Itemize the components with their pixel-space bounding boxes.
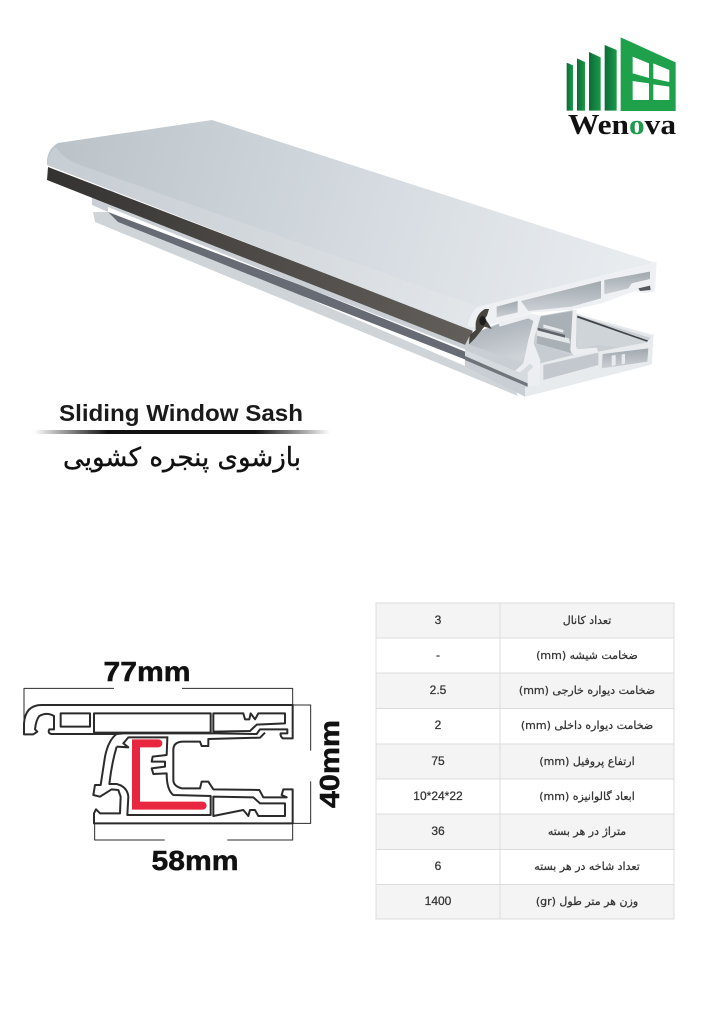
floor bbox=[533, 343, 602, 389]
base silhouette bbox=[465, 310, 653, 397]
upper sash outline bbox=[24, 705, 293, 738]
galvanized reinforcement bbox=[136, 743, 203, 806]
english heading: Sliding Window Sash bbox=[59, 400, 303, 426]
row: meters per bundle bbox=[431, 824, 626, 838]
heading divider bbox=[34, 430, 330, 434]
row: profile height bbox=[431, 754, 635, 768]
row: galvanized dimensions: 10*24*22 bbox=[413, 789, 463, 803]
top sash end face bbox=[468, 262, 657, 328]
title bbox=[34, 400, 330, 473]
central wall and foot bbox=[570, 310, 598, 356]
persian heading: بازشوی پنجره کشویی bbox=[63, 443, 301, 473]
label: 58mm: 58mm bbox=[152, 845, 238, 876]
dimension lines bbox=[24, 688, 311, 840]
upper light strip bbox=[92, 190, 523, 372]
row: inner wall thickness: ضخامت دیواره داخلی (mm) bbox=[521, 719, 653, 732]
row: inner wall thickness bbox=[435, 718, 653, 732]
table grid bbox=[376, 603, 674, 919]
lower frame strip bbox=[93, 212, 518, 396]
lower web bbox=[93, 733, 293, 823]
cross-section diagram bbox=[24, 656, 345, 876]
row: inner wall thickness: 2 bbox=[435, 718, 442, 732]
row: channels: تعداد کانال bbox=[563, 614, 611, 627]
row: channels: 3 bbox=[435, 613, 442, 627]
profile drawing bbox=[24, 688, 311, 840]
dark channel bbox=[108, 212, 528, 384]
row: channels bbox=[435, 613, 611, 627]
end cross-section bbox=[465, 262, 657, 397]
product image: sliding sash profile bbox=[47, 120, 657, 397]
row: pieces per bundle bbox=[435, 859, 640, 873]
row: glass thickness: ضخامت شیشه (mm) bbox=[536, 649, 638, 662]
row: profile height: ارتفاع پروفیل (mm) bbox=[539, 755, 635, 768]
rounded front edge bbox=[47, 147, 482, 331]
lower frame end face bbox=[525, 334, 653, 397]
row: galvanized dimensions: ابعاد گالوانیزه (mm) bbox=[539, 790, 635, 803]
label: 40mm: 40mm bbox=[314, 720, 345, 808]
row: meters per bundle: 36 bbox=[431, 824, 445, 838]
gasket tip bbox=[469, 309, 492, 344]
row: glass thickness: - bbox=[436, 648, 440, 662]
row: glass thickness bbox=[436, 648, 638, 662]
row: meters per bundle: متراژ در هر بسته bbox=[548, 825, 626, 838]
web side surface bbox=[470, 318, 533, 363]
sash chambers bbox=[497, 301, 518, 317]
row: weight per meter: وزن هر متر طول (gr) bbox=[536, 895, 638, 908]
row: pieces per bundle: 6 bbox=[435, 859, 442, 873]
row: pieces per bundle: تعداد شاخه در هر بسته bbox=[534, 860, 640, 873]
top face bbox=[47, 120, 656, 330]
rubber gasket bbox=[47, 167, 473, 346]
web wall bbox=[498, 313, 541, 388]
label: 77mm: 77mm bbox=[104, 656, 190, 687]
specification table bbox=[376, 603, 674, 919]
upper chambers bbox=[61, 713, 90, 727]
inner plates bbox=[543, 324, 563, 333]
row: outer wall thickness bbox=[430, 683, 655, 697]
recess behind web bbox=[537, 311, 573, 353]
row: galvanized dimensions bbox=[413, 789, 635, 803]
table row backgrounds bbox=[376, 603, 674, 919]
row: outer wall thickness: 2.5 bbox=[430, 683, 447, 697]
icon: green building with window bbox=[567, 37, 676, 111]
logo: Wenova bbox=[567, 37, 676, 141]
long hook strip bbox=[465, 350, 535, 384]
row: outer wall thickness: ضخامت دیواره خارجی (mm) bbox=[519, 684, 655, 697]
row: weight per meter bbox=[425, 894, 638, 908]
dimension labels bbox=[104, 656, 345, 876]
rail plane bbox=[577, 318, 648, 350]
wordmark: Wenova bbox=[568, 110, 676, 141]
row: profile height: 75 bbox=[431, 754, 445, 768]
row: weight per meter: 1400 bbox=[425, 894, 452, 908]
